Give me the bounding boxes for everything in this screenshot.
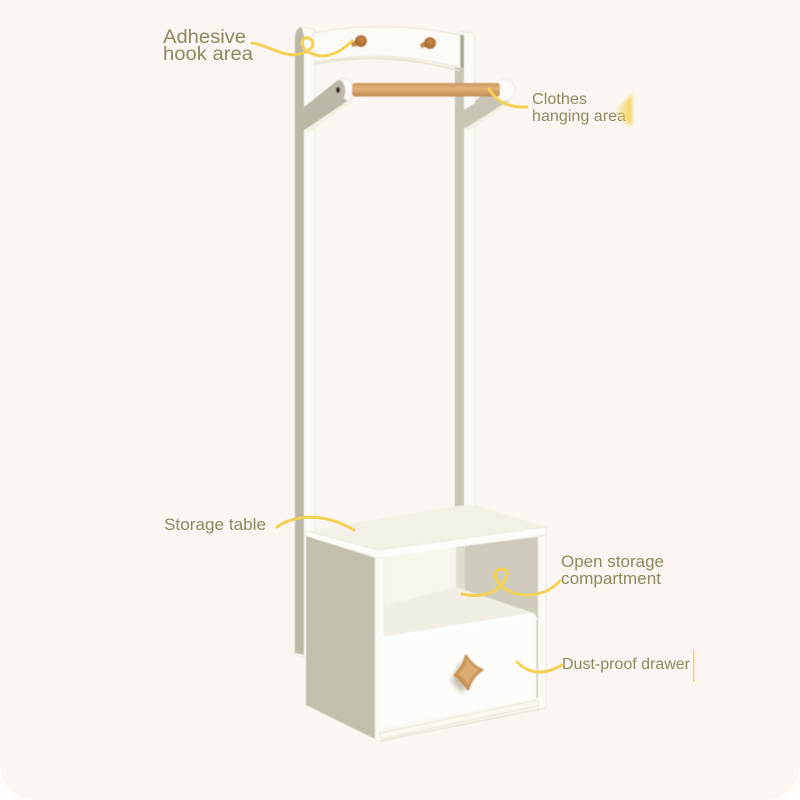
callout: open storage compartment bbox=[462, 553, 664, 596]
label text: Adhesive bbox=[163, 27, 246, 48]
yellow connector bbox=[489, 89, 527, 107]
storage table top bbox=[306, 505, 546, 559]
yellow flare mark bbox=[614, 94, 632, 125]
star-shaped wooden knob bbox=[451, 656, 482, 694]
right wooden hook bbox=[420, 37, 436, 49]
yellow connector bbox=[517, 662, 562, 672]
right rail bracket bbox=[464, 79, 515, 131]
callout: clothes hanging area bbox=[489, 89, 632, 125]
label text: Open storage bbox=[561, 553, 664, 571]
callout: storage table bbox=[164, 516, 354, 534]
open storage compartment bbox=[383, 537, 538, 638]
yellow tick mark bbox=[693, 650, 694, 682]
yellow loop connector bbox=[462, 569, 560, 596]
wooden clothes rail bbox=[352, 83, 500, 96]
left wooden hook bbox=[351, 35, 367, 47]
drawer bbox=[380, 613, 546, 741]
left post bbox=[295, 27, 315, 660]
left rail bracket bbox=[304, 78, 354, 133]
yellow loop connector bbox=[252, 38, 352, 56]
product: clothes rack with storage table bbox=[295, 26, 546, 741]
callout: adhesive hook area bbox=[163, 27, 352, 65]
label text: Dust-proof drawer bbox=[562, 656, 690, 673]
right post bbox=[455, 32, 475, 508]
side panel bbox=[306, 536, 375, 739]
yellow connector bbox=[277, 517, 354, 530]
callout: open storage compartment: compartment bbox=[561, 570, 661, 588]
label text: Clothes bbox=[532, 91, 587, 108]
callout: dust-proof drawer bbox=[517, 650, 694, 682]
top arch board with hooks bbox=[313, 26, 460, 71]
callout: clothes hanging area: hanging area bbox=[532, 108, 626, 125]
label text: Storage table bbox=[164, 516, 266, 534]
cabinet front frame bbox=[375, 535, 546, 741]
callout: adhesive hook area: hook area bbox=[163, 44, 253, 65]
